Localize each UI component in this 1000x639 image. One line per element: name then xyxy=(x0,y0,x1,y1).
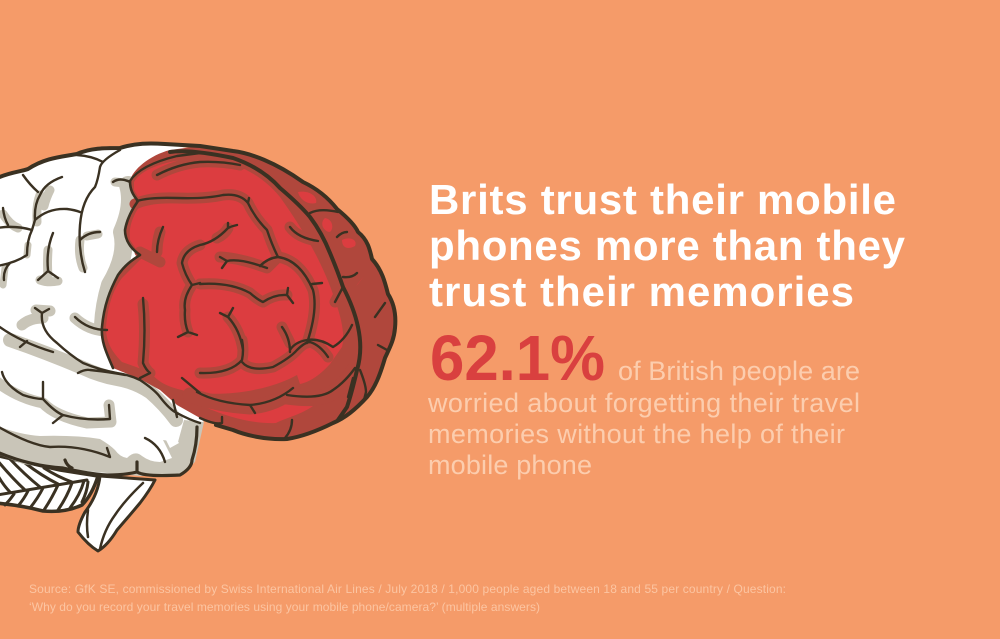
brain stem xyxy=(78,476,155,551)
heading: trust their memories xyxy=(429,268,854,315)
red sulci shading xyxy=(135,162,355,407)
source note xyxy=(29,582,786,614)
grey shading xyxy=(0,182,176,423)
outer contour and fold lines xyxy=(0,143,395,476)
red right hemisphere xyxy=(102,146,395,439)
illustration: brain xyxy=(0,143,395,551)
body text: mobile phone xyxy=(428,450,592,480)
body text: memories without the help of their xyxy=(428,419,845,449)
cerebellum xyxy=(0,455,98,511)
heading xyxy=(429,176,906,315)
body text: of British people are xyxy=(618,356,860,386)
light red lobe xyxy=(106,158,343,394)
white left lobes xyxy=(0,144,205,476)
lower contour of white lobes xyxy=(0,427,197,476)
body text xyxy=(427,356,860,480)
highlights on outer lobes xyxy=(298,192,364,286)
heading: Brits trust their mobile xyxy=(429,176,896,223)
inner thick contour xyxy=(170,151,360,420)
heading: phones more than they xyxy=(429,222,906,269)
outer contour xyxy=(0,143,395,439)
body text: worried about forgetting their travel xyxy=(427,388,860,418)
source note: Source: GfK SE, commissioned by Swiss International Air Lines / July 2018 / 1,000 people aged between 18 and 55 per country / Question: xyxy=(29,582,786,596)
source note: ‘Why do you record your travel memories using your mobile phone/camera?’ (multiple answers) xyxy=(29,600,540,614)
red-white boundary xyxy=(102,181,140,368)
statistic: 62.1%: 62.1% xyxy=(430,322,605,394)
white-side fold lines xyxy=(0,150,200,462)
red fold lines xyxy=(130,153,387,438)
